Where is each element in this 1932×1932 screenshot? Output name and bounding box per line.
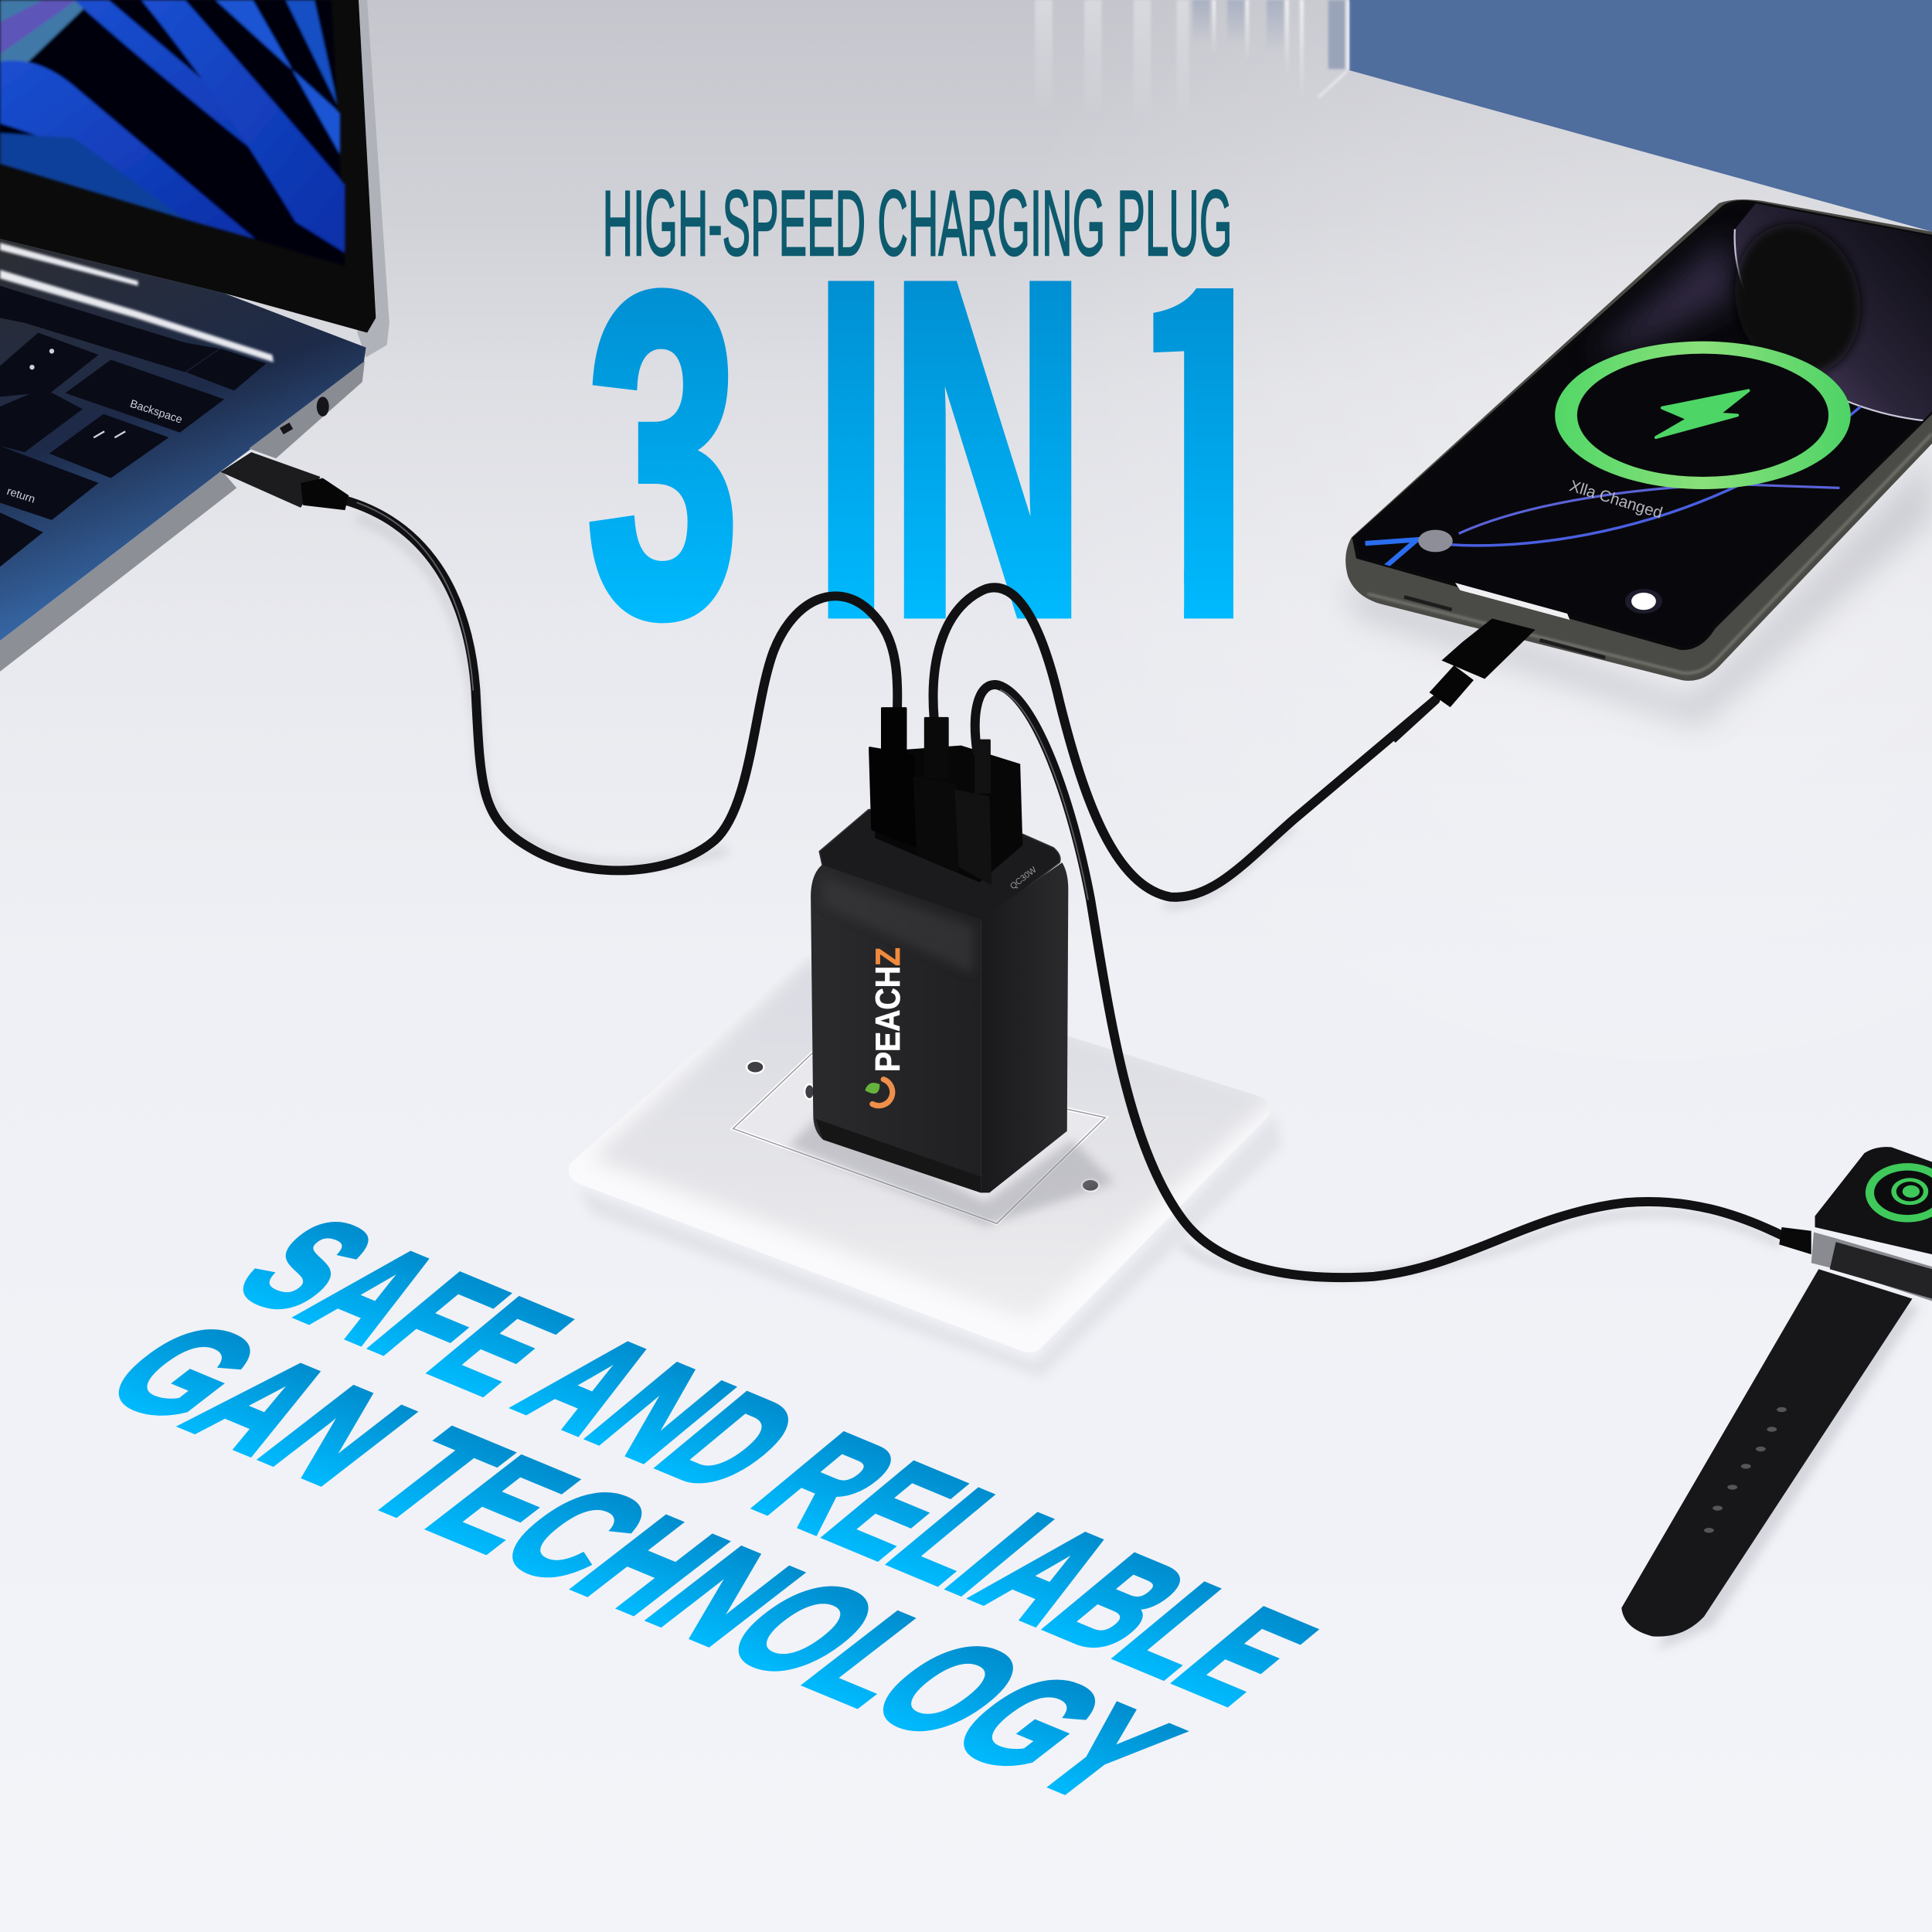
charging ring [1555,342,1851,489]
USB connector 1 [870,709,917,846]
keyboard key legends [5,349,184,506]
watch green ring [1866,1163,1932,1223]
screw holes [747,1061,1099,1192]
phone body [1345,199,1932,681]
blue wall panel [1349,0,1932,232]
phone shadow [1345,456,1932,727]
laptop deck [0,239,366,641]
laptop front edge [0,471,236,672]
charger base band [815,1119,981,1192]
laptop USB connector [220,452,349,510]
cable shadows [357,518,1781,1277]
laptop screen wallpaper [0,0,345,266]
keyboard key legends: Backspace [128,398,184,427]
charger front shading [823,877,974,974]
keyboard highlights [0,243,274,362]
socket recess [733,1053,1105,1223]
logo wordmark: PEACHZ [869,947,907,1072]
phone edge highlight [1368,434,1932,673]
logo leaf [865,1083,879,1094]
watch puck [1815,1147,1932,1254]
laptop [0,0,389,672]
strap [1621,1269,1912,1637]
cable: laptop to charger [345,500,897,870]
keyboard keys [0,286,266,566]
charger shadow [788,1115,1115,1226]
strap shadow [1657,1281,1920,1651]
USB connector 2 [914,719,957,871]
heading: 3 in 1 [587,172,1304,727]
charger rating label: QC30W [1009,865,1039,892]
heading: 3 in 1: 1 [1103,172,1304,727]
slanted caption: safe and reliable: SAFE AND RELIABLE [202,1192,1349,1730]
phone screen [1354,202,1932,648]
plate face [591,951,1281,1321]
charger front face [811,865,981,1192]
lightning bolt icon [1656,390,1748,437]
heading: 3 in 1: IN [813,172,1087,726]
charger top face [819,810,1060,920]
logo: peachz [865,947,907,1106]
keyboard key legends: return [5,485,36,506]
plate shadow [579,1115,1281,1378]
plate body [569,954,1270,1352]
strap holes [1704,1407,1787,1532]
charger port block [875,746,1022,883]
phone indicator dots [1418,530,1662,614]
cable: charger to phone [934,587,1435,897]
laptop lid edge [357,0,389,357]
heading: 3 in 1: 3 [587,200,740,709]
charger [811,709,1068,1192]
watch cable connector [1779,1227,1811,1254]
phone USB connector [1393,618,1536,740]
charger side face [981,862,1068,1192]
slanted caption: gan technology: GAN TECHNOLOGY [69,1297,1215,1826]
frosted glass panel [1035,0,1349,123]
watch hinge [1811,1232,1932,1301]
speaker grille [1403,595,1606,659]
logo ring [872,1080,893,1106]
laptop screen bezel [0,0,376,332]
cable: charger to watch [975,685,1783,1277]
USB connector 3 [956,740,991,883]
phone [1345,199,1932,740]
laptop side ports [249,361,365,458]
watch charger and strap [1621,1147,1932,1651]
phone wallpaper [1366,203,1932,570]
phone bottom highlight [1455,583,1570,620]
wall socket plate [569,951,1281,1378]
phone status text: Xlla Changed [1567,477,1665,522]
